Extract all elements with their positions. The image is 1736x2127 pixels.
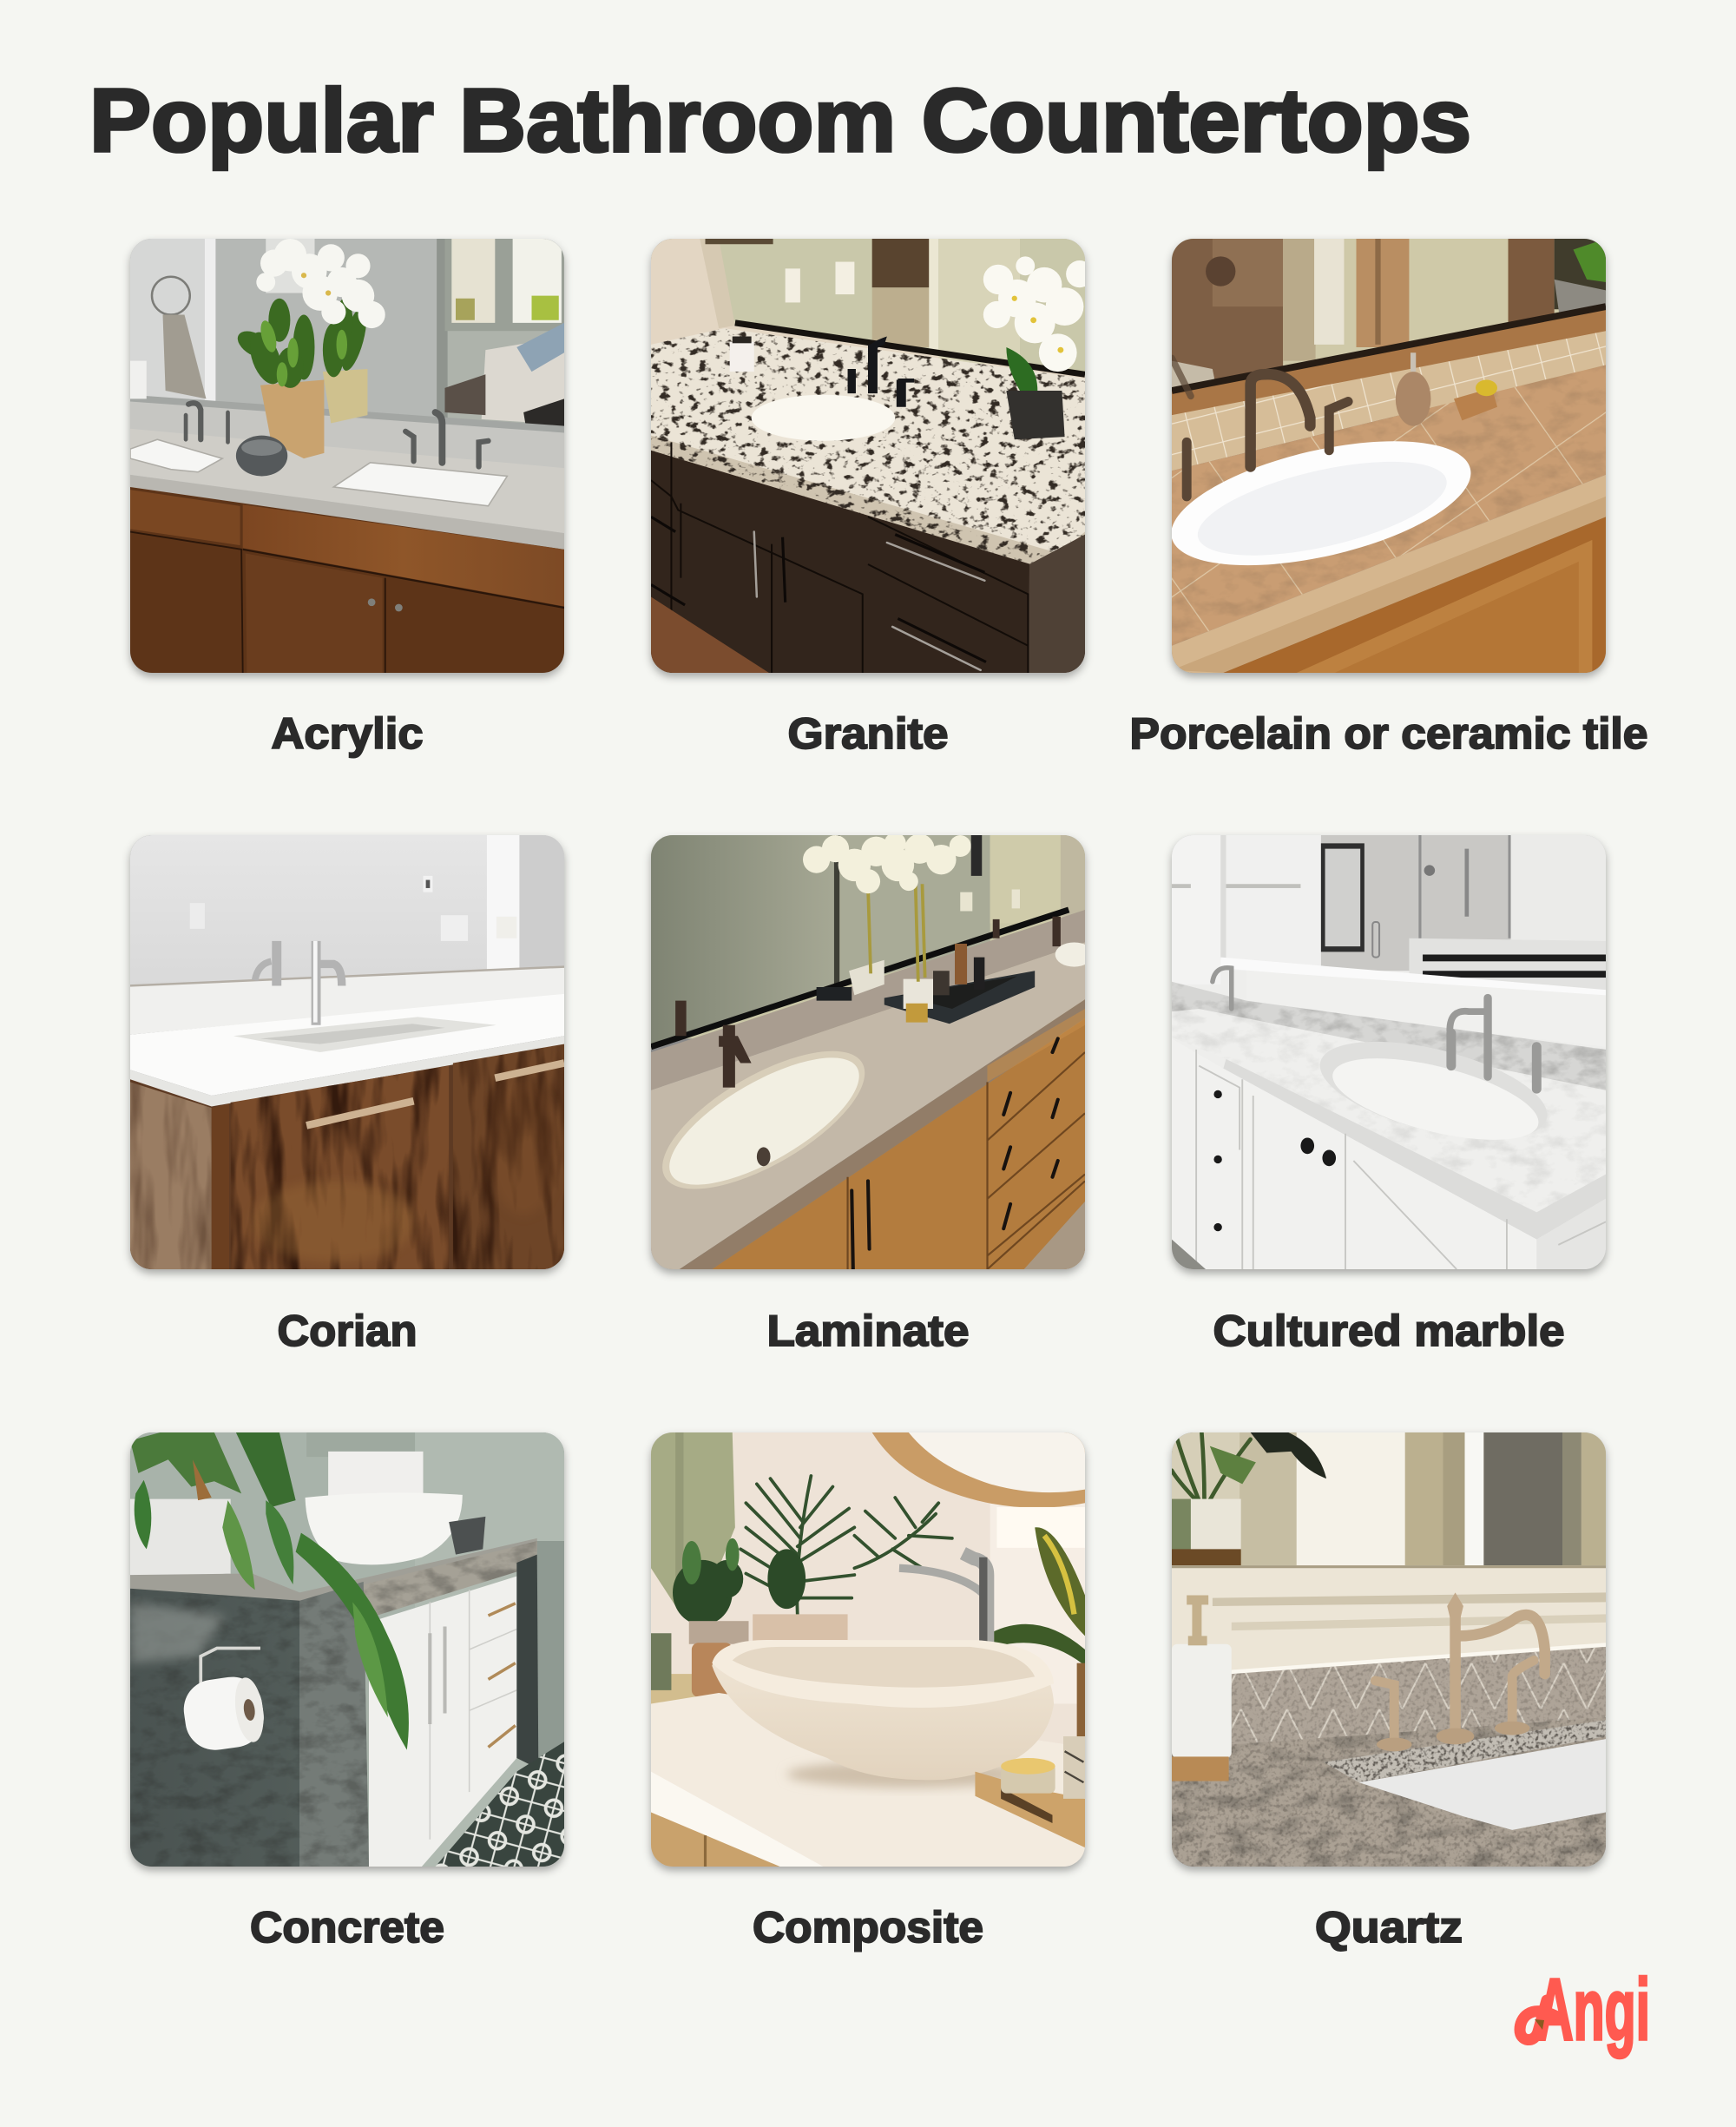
logo: Angi — [1520, 1961, 1650, 2058]
photo: composite countertop — [651, 1432, 1085, 1867]
logo: Angi: Angi — [1536, 1961, 1650, 2058]
panel: composite — [651, 1432, 1085, 1952]
panel: laminate — [642, 833, 1093, 1355]
panel: concrete — [130, 1432, 564, 1952]
label: granite: Granite — [788, 709, 948, 758]
label: quartz: Quartz — [1315, 1903, 1463, 1952]
label: composite: Composite — [753, 1903, 983, 1952]
photo: concrete countertop — [130, 1432, 564, 1867]
photo: acrylic countertop — [130, 239, 564, 673]
title: Popular Bathroom Countertops — [89, 70, 1471, 170]
label: corian: Corian — [278, 1307, 417, 1355]
photo: cultured marble countertop — [1172, 835, 1606, 1269]
label: cultured marble: Cultured marble — [1213, 1307, 1564, 1355]
panel: cultured marble — [1172, 835, 1606, 1355]
photo: laminate countertop — [642, 833, 1093, 1269]
photo: tile countertop — [1160, 239, 1606, 673]
label: concrete: Concrete — [250, 1903, 444, 1952]
panel: quartz — [1172, 1432, 1606, 1952]
label: acrylic: Acrylic — [271, 709, 424, 758]
photo: corian countertop — [130, 835, 564, 1269]
panel: granite — [651, 239, 1093, 758]
panel: porcelain or ceramic tile — [1130, 239, 1647, 758]
panel: acrylic — [130, 239, 564, 758]
photo: quartz countertop — [1172, 1432, 1606, 1867]
panel: corian — [130, 835, 564, 1355]
label: laminate: Laminate — [767, 1307, 969, 1355]
photo: granite countertop — [651, 239, 1093, 673]
label: porcelain or ceramic tile: Porcelain or ceramic tile — [1130, 709, 1647, 758]
